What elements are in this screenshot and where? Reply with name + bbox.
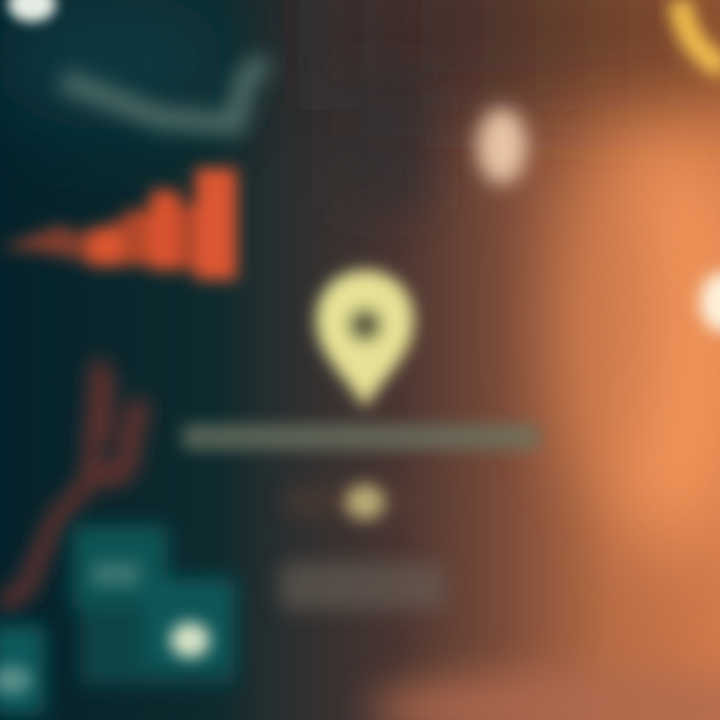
line chart: dark red curve — [0, 360, 140, 605]
grey trend line — [62, 60, 265, 124]
heading: blurred title bar — [182, 424, 540, 450]
icon: white dot top left — [8, 0, 56, 22]
pin centre — [348, 308, 382, 342]
bar chart: orange bars — [0, 168, 237, 280]
icon: yellow ring top right — [680, 0, 720, 68]
text block: blurred caption — [280, 562, 445, 610]
card dot — [170, 622, 210, 658]
icon: top light blob — [477, 108, 527, 184]
icon: location pin — [316, 270, 414, 408]
card label left — [0, 666, 32, 694]
text block: dark accent behind dot — [285, 488, 445, 516]
panel: teal data cards — [0, 525, 235, 715]
panel: upper line chart — [62, 60, 265, 124]
icon: small yellow dot — [345, 484, 385, 520]
card label — [92, 562, 140, 586]
icon: bright glow right edge — [700, 272, 720, 332]
